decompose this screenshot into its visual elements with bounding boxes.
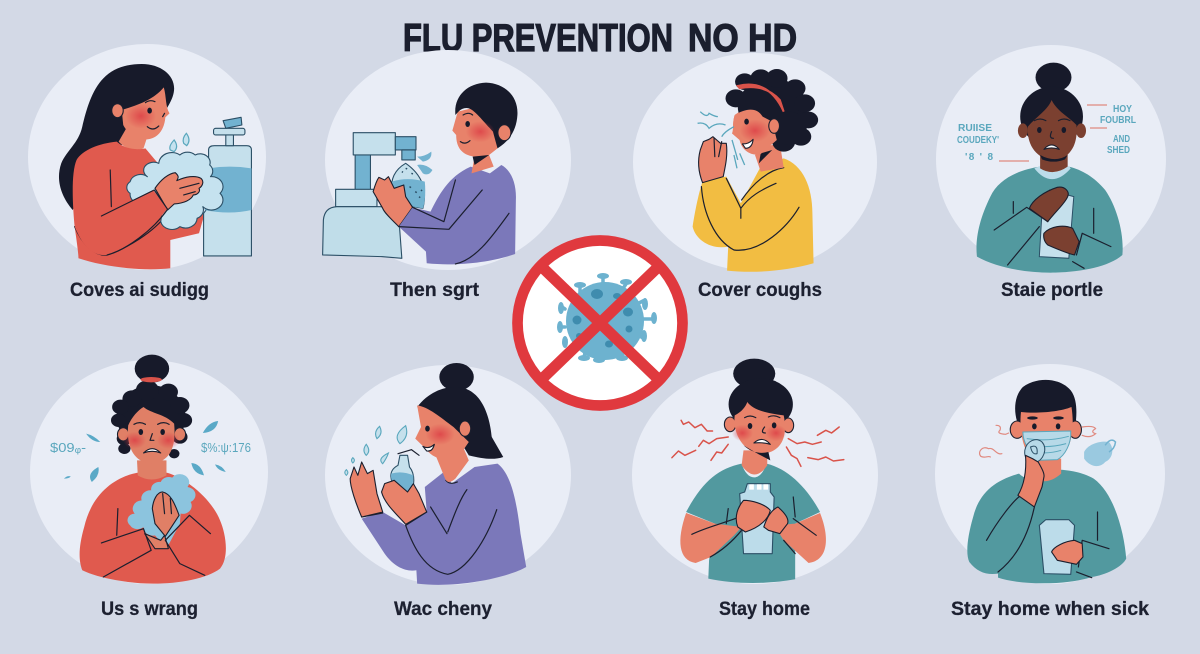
figure: sick woman with curly hair and foam xyxy=(64,355,226,584)
annotations: teal pseudo text: COUDEKY' xyxy=(957,135,999,146)
labels: Staie portle xyxy=(1001,279,1103,301)
labels: Stay home xyxy=(719,598,810,620)
bottle xyxy=(204,117,251,256)
panel: coves ai sudigg xyxy=(28,44,266,270)
annotations: teal pseudo text: FOUBRL xyxy=(1100,115,1136,126)
labels: Cover coughs xyxy=(698,279,822,301)
figure: woman with fever holding a bottle xyxy=(672,359,844,583)
annotations: teal pseudo text: $%:ψ:176 xyxy=(201,440,251,455)
panel: stay home xyxy=(632,359,878,584)
labels: Stay home when sick xyxy=(951,598,1149,620)
annotations: teal pseudo text xyxy=(957,104,1136,163)
title: NO HD xyxy=(688,17,797,60)
panel: staie portle xyxy=(936,45,1166,273)
annotations: teal pseudo text: HOY xyxy=(1113,104,1132,115)
figure: woman with bun holding tissue xyxy=(976,63,1123,273)
annotations: teal pseudo text: $09ᵩ- xyxy=(50,440,86,455)
figure: boy at faucet with bottle xyxy=(323,83,517,264)
annotations: teal pseudo text: AND xyxy=(1113,134,1130,145)
annotations: teal pseudo text xyxy=(50,440,251,455)
figure: woman spraying sanitizer xyxy=(345,363,526,585)
icon: red cross xyxy=(544,269,656,377)
panel: cover coughs xyxy=(633,53,877,272)
hand xyxy=(155,173,203,210)
panel: stay home when sick xyxy=(935,364,1165,584)
labels: Us s wrang xyxy=(101,598,198,620)
icon: virus xyxy=(557,273,657,363)
foam xyxy=(127,152,223,229)
title: FLU PREVENTION xyxy=(403,17,673,60)
figure: woman washing hands with foam beside a bottle xyxy=(59,64,251,269)
labels: Wac cheny xyxy=(394,598,492,620)
annotations: teal pseudo text: SHED xyxy=(1107,145,1130,156)
labels: Coves ai sudigg xyxy=(70,279,209,301)
labels xyxy=(70,279,1149,620)
panel: wac cheny xyxy=(325,363,571,585)
annotations: teal pseudo text: RUIISE xyxy=(958,123,992,134)
labels: Then sgrt xyxy=(390,279,479,301)
figure: girl coughing into hands xyxy=(693,69,818,272)
annotations: teal pseudo text: '8 ' 8 xyxy=(965,152,993,163)
panel: us s wrang xyxy=(30,355,268,584)
panel: then sgrt xyxy=(323,50,571,270)
center icon: no virus symbol xyxy=(518,240,682,406)
figure: man adjusting face mask holding a cup xyxy=(967,380,1126,583)
